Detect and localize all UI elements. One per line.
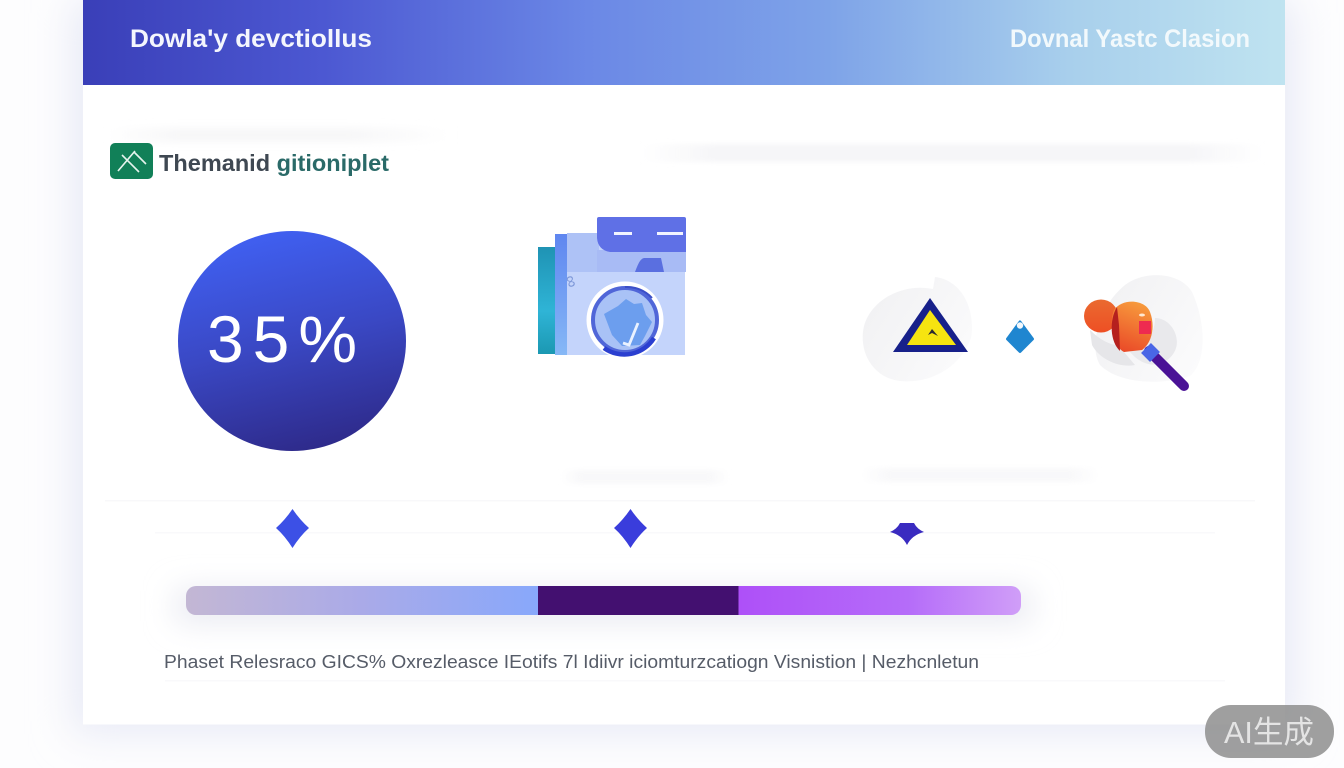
icon: warning triangle on blob [863,277,972,381]
icon: document stack with gauge: ∞ [560,272,582,290]
AI badge: AI生成 [1224,715,1314,750]
timeline marker 3 [890,523,924,545]
bar caption: Phaset Relesraco GICS% Oxrezleasce IEotifs 7l Idiivr iciomturzcatiogn Visnistion | Nezhcnletun [164,651,979,672]
faint section bands [105,128,1265,682]
section heading text: Themanid gitioniplet [159,150,389,176]
stat circle 35% [178,231,406,451]
bar segment 1 [186,586,538,615]
icon: document stack with gauge [538,217,686,358]
stat circle 35%: 35% [207,302,357,376]
header band [83,0,1285,85]
timeline marker 1 [276,509,309,548]
section heading [110,143,389,179]
bar segment 2 [538,586,738,615]
progress bar [176,586,1031,622]
icon: green badge [110,143,153,179]
timeline marker 2 [614,509,647,548]
header right title: Dovnal Yastc Clasion [1010,25,1250,53]
icon: orange magnifier on blob [1084,275,1203,386]
header left title: Dowla'y devctiollus [130,25,372,53]
AI badge [1205,705,1334,758]
icon: blue diamond tag [1008,322,1032,352]
bar segment 3 [738,586,1021,615]
